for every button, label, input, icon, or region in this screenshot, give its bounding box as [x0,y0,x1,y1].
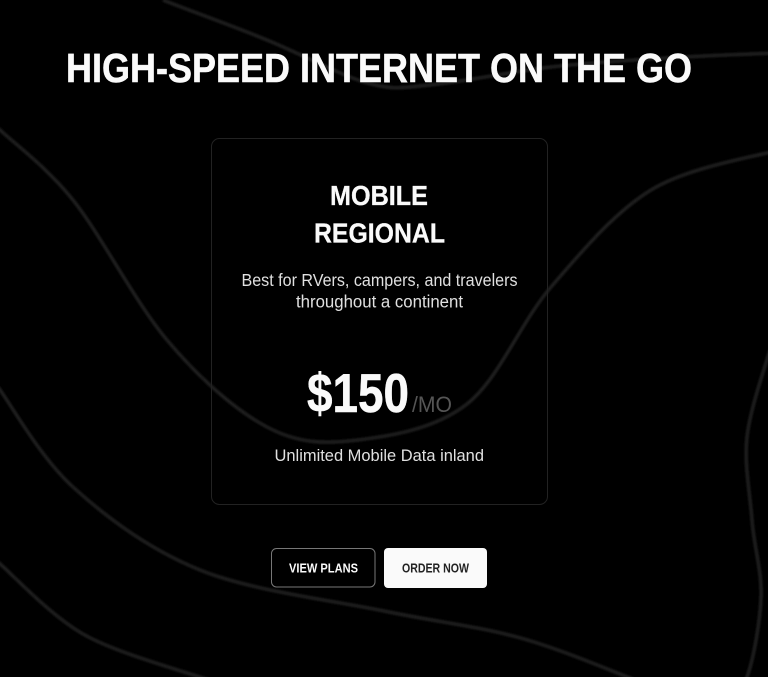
button: order now: ORDER NOW [402,562,469,576]
plan description: Best for RVers, campers, and travelers [242,270,518,290]
title: HIGH-SPEED INTERNET ON THE GO [66,45,692,91]
plan description [242,270,518,312]
panel: pricing card [212,138,548,504]
button: view plans: VIEW PLANS [289,562,358,576]
price unit: /MO [412,392,452,417]
plan description: throughout a continent [296,292,463,312]
button: view plans [272,548,375,587]
data allowance: Unlimited Mobile Data inland [274,446,484,465]
plan name [314,180,445,248]
plan name: MOBILE [330,180,428,211]
button: order now [384,548,487,588]
plan name: REGIONAL [314,218,445,248]
price: $150 [307,362,409,424]
